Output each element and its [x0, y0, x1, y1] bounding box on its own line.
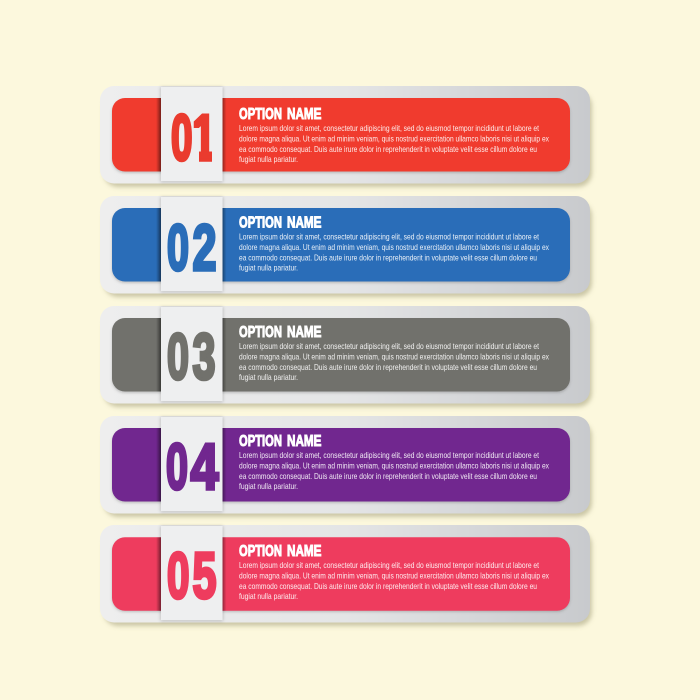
heading: NAME — [287, 324, 322, 341]
description — [239, 451, 549, 491]
description: ea commodo consequat. Duis aute irure dolor in reprehenderit in voluptate velit esse cillum dolore eu — [239, 145, 537, 154]
description: dolore magna aliqua. Ut enim ad minim veniam, quis nostrud exercitation ullamco laboris nisi ut aliquip ex — [239, 243, 549, 252]
number tab — [161, 197, 222, 291]
card panel — [100, 86, 590, 184]
card shadow — [104, 531, 592, 626]
number tab shadow — [160, 417, 223, 512]
number tab shadow — [160, 307, 223, 402]
number: 5 — [192, 539, 216, 612]
option row 4 — [100, 416, 592, 517]
option row 5 — [100, 525, 592, 626]
description: ea commodo consequat. Duis aute irure dolor in reprehenderit in voluptate velit esse cillum dolore eu — [239, 582, 537, 591]
description: Lorem ipsum dolor sit amet, consectetur adipiscing elit, sed do eiusmod tempor incididunt ut labore et — [239, 342, 540, 351]
heading: NAME — [287, 543, 322, 560]
number — [171, 112, 212, 162]
number: 0 — [171, 101, 192, 174]
option row 2 — [100, 196, 592, 297]
number tab — [161, 87, 222, 181]
number — [166, 430, 218, 503]
number: 3 — [192, 320, 216, 393]
number: 0 — [166, 430, 188, 503]
description: fugiat nulla pariatur. — [239, 482, 298, 491]
colour band shadow — [112, 430, 570, 503]
band left shade — [156, 208, 161, 282]
heading: OPTION — [239, 433, 282, 450]
description: dolore magna aliqua. Ut enim ad minim veniam, quis nostrud exercitation ullamco laboris nisi ut aliquip ex — [239, 462, 549, 470]
card shadow — [104, 92, 592, 187]
number tab shadow — [160, 526, 223, 621]
band right shade — [222, 318, 226, 392]
number tab — [161, 417, 222, 511]
colour band shadow — [112, 539, 570, 612]
colour band shadow — [112, 320, 570, 393]
band right shade — [222, 98, 226, 172]
description: fugiat nulla pariatur. — [239, 264, 298, 272]
number: 1 — [192, 101, 216, 174]
card shadow — [104, 202, 592, 297]
description: dolore magna aliqua. Ut enim ad minim veniam, quis nostrud exercitation ullamco laboris nisi ut aliquip ex — [239, 572, 549, 580]
colour band — [112, 208, 570, 282]
heading: NAME — [287, 214, 322, 232]
number tab — [161, 307, 222, 401]
band right shade — [222, 208, 226, 282]
description: ea commodo consequat. Duis aute irure dolor in reprehenderit in voluptate velit esse cillum dolore eu — [239, 254, 537, 262]
description — [239, 124, 549, 164]
heading: OPTION — [239, 106, 282, 123]
description: fugiat nulla pariatur. — [239, 373, 298, 382]
card panel — [100, 525, 590, 622]
number: 0 — [167, 211, 189, 284]
heading: OPTION — [239, 214, 282, 232]
band left shade — [156, 318, 161, 392]
colour band shadow — [112, 100, 570, 173]
number tab shadow — [160, 197, 223, 292]
colour band shadow — [112, 210, 570, 283]
number tab shadow — [160, 87, 223, 182]
band right shade — [222, 428, 226, 502]
band left shade — [156, 537, 161, 611]
description: fugiat nulla pariatur. — [239, 592, 298, 601]
colour band — [112, 537, 570, 611]
number tab — [161, 526, 222, 620]
number: 0 — [167, 320, 189, 393]
description: ea commodo consequat. Duis aute irure dolor in reprehenderit in voluptate velit esse cillum dolore eu — [239, 472, 537, 481]
description: ea commodo consequat. Duis aute irure dolor in reprehenderit in voluptate velit esse cillum dolore eu — [239, 363, 537, 372]
heading: NAME — [287, 106, 322, 123]
description: Lorem ipsum dolor sit amet, consectetur adipiscing elit, sed do eiusmod tempor incididunt ut labore et — [239, 561, 540, 570]
option row 1 — [100, 86, 592, 187]
heading: OPTION — [239, 324, 282, 341]
colour band — [112, 428, 570, 502]
number: 2 — [192, 211, 216, 284]
number: 4 — [190, 430, 218, 503]
heading: NAME — [287, 433, 322, 450]
card shadow — [104, 422, 592, 517]
description: Lorem ipsum dolor sit amet, consectetur adipiscing elit, sed do eiusmod tempor incididunt ut labore et — [239, 124, 540, 133]
band left shade — [156, 428, 161, 502]
colour band — [112, 318, 570, 392]
band right shade — [222, 537, 226, 611]
description: dolore magna aliqua. Ut enim ad minim veniam, quis nostrud exercitation ullamco laboris nisi ut aliquip ex — [239, 134, 549, 144]
option row 3 — [100, 306, 592, 407]
description: Lorem ipsum dolor sit amet, consectetur adipiscing elit, sed do eiusmod tempor incididunt ut labore et — [239, 232, 540, 242]
heading: OPTION — [239, 543, 282, 560]
card panel — [100, 306, 590, 404]
band left shade — [156, 98, 161, 172]
number: 0 — [167, 539, 190, 612]
description: Lorem ipsum dolor sit amet, consectetur adipiscing elit, sed do eiusmod tempor incididunt ut labore et — [239, 451, 540, 460]
colour band — [112, 98, 570, 172]
description — [239, 561, 549, 601]
card panel — [100, 196, 590, 294]
card shadow — [104, 312, 592, 407]
description: fugiat nulla pariatur. — [239, 155, 298, 164]
card panel — [100, 416, 590, 514]
description — [239, 342, 549, 382]
description — [239, 232, 549, 272]
description: dolore magna aliqua. Ut enim ad minim veniam, quis nostrud exercitation ullamco laboris nisi ut aliquip ex — [239, 352, 549, 362]
